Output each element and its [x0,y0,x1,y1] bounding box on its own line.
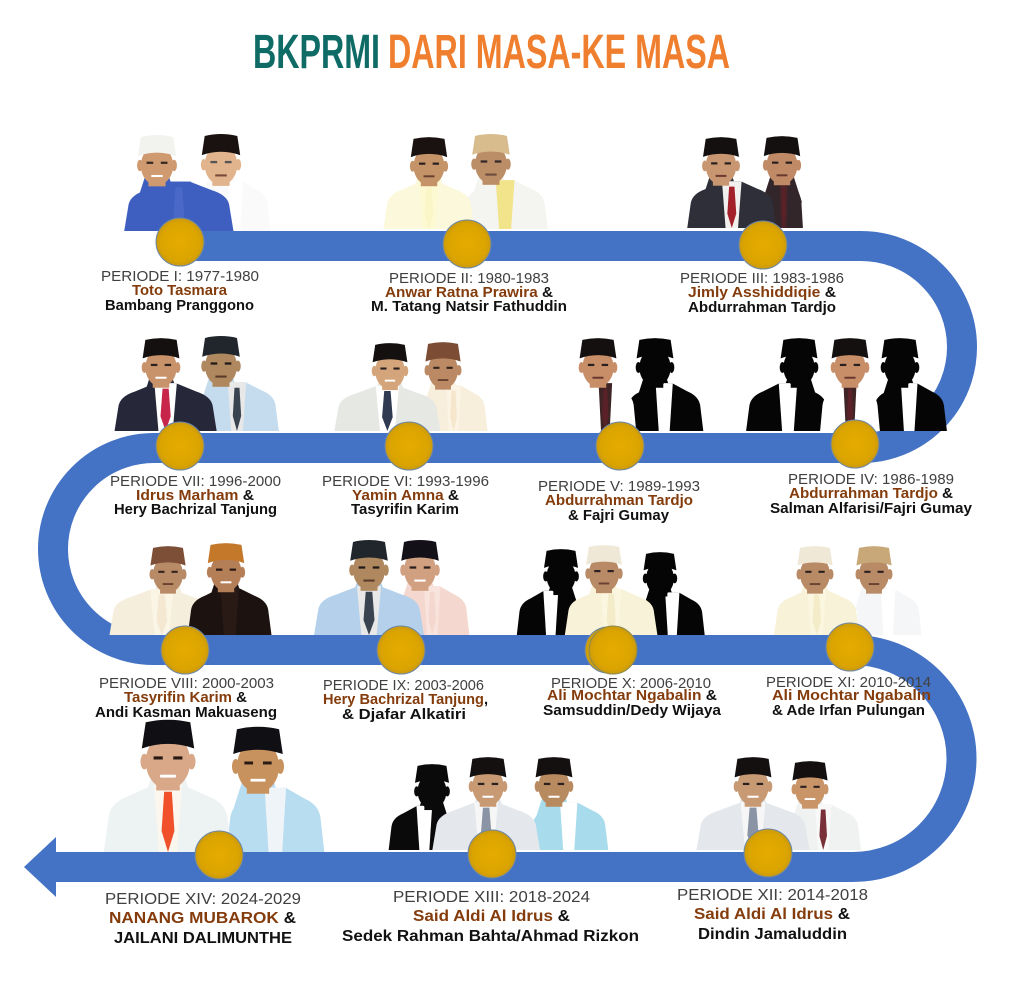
period label: Tasyrifin Karim & [124,689,247,706]
period label: PERIODE VI: 1993-1996 [322,473,489,490]
portraits: Yamin Amna and Tasyrifin Karim [334,342,487,431]
period label: Ali Mochtar Ngabalin & [547,687,717,704]
panel: periode XIV [104,720,324,947]
period label: Hery Bachrizal Tanjung, [323,691,488,708]
period label: NANANG MUBAROK & [109,910,296,927]
period label: Bambang Pranggono [105,297,254,314]
panel: periode V [538,338,703,524]
panel: periode III [680,136,844,316]
portraits: Tasyrifin Karim and Andi Kasman Makuaseng [109,543,271,635]
period label [543,675,722,719]
period label [322,473,489,518]
period label [95,675,277,721]
period label: PERIODE VIII: 2000-2003 [99,675,274,692]
title: BKPRMI [253,26,380,79]
panel: periode IX [314,540,488,723]
portraits: Said Aldi Al Idrus, silhouette and Ahmad Rizkon [389,757,608,850]
milestone dot [161,626,209,674]
period label: JAILANI DALIMUNTHE [114,930,292,947]
period label: PERIODE IV: 1986-1989 [788,471,954,488]
portraits: Abdurrahman Tardjo and silhouette [575,338,703,431]
portraits: Anwar Ratna Prawira and M. Tatang Natsir Fathuddin [384,134,548,229]
period label [766,674,931,719]
period label: PERIODE II: 1980-1983 [389,270,549,287]
period label: Hery Bachrizal Tanjung [114,501,277,518]
portraits: Ali Mochtar Ngabalin and silhouettes [517,545,705,635]
panel: periode II [371,134,567,315]
period label: Anwar Ratna Prawira & [385,284,553,301]
portraits: Idrus Marham and Hery Bachrizal Tanjung [115,336,279,431]
milestone dot [156,218,204,266]
period label: PERIODE XI: 2010-2014 [766,674,931,691]
period label: PERIODE IX: 2003-2006 [323,677,484,694]
milestone dot [156,422,204,470]
period label: Yamin Amna & [352,487,459,504]
period label: & Djafar Alkatiri [342,706,466,723]
period label [323,677,488,723]
period label [110,473,281,518]
milestone dot [443,220,491,268]
milestone dot [596,422,644,470]
portraits: Abdurrahman Tardjo and silhouettes [746,338,947,431]
period label: Samsuddin/Dedy Wijaya [543,702,722,719]
panel: periode VII [110,336,281,518]
milestone dot [744,829,792,877]
period label [105,891,301,947]
period label: PERIODE XII: 2014-2018 [677,887,868,904]
period label [680,270,844,316]
period label: Dindin Jamaluddin [698,926,847,943]
timeline arrow path [24,246,962,897]
period label: & Fajri Gumay [568,507,670,524]
panel: periode XIII [342,757,639,945]
portraits: Ali Mochtar Ngabalin and Ade Irfan Pulungan [774,546,922,635]
period label [770,471,973,517]
period label: PERIODE III: 1983-1986 [680,270,844,287]
period label [371,270,567,315]
period label [342,889,639,945]
portraits: Said Aldi Al Idrus and Dindin Jamaluddin [696,757,861,850]
period label: PERIODE VII: 1996-2000 [110,473,281,490]
milestone dot [377,626,425,674]
portraits: Nanang Mubarok and Jailani Dalimunthe [104,720,324,852]
period label: Abdurrahman Tardjo [688,299,836,316]
panel: periode XI [766,546,931,719]
milestone dots [585,626,637,674]
period label: PERIODE V: 1989-1993 [538,478,700,495]
period label: Tasyrifin Karim [351,501,459,518]
period label: Toto Tasmara [132,282,228,299]
period label: Jimly Asshiddiqie & [688,284,836,301]
period label: Sedek Rahman Bahta/Ahmad Rizkon [342,928,639,945]
period label [101,268,259,314]
period label: Said Aldi Al Idrus & [694,906,850,923]
milestone dot [739,221,787,269]
period label [677,887,868,943]
panel: periode IV [746,338,973,517]
period label: Andi Kasman Makuaseng [95,704,277,721]
panel: periode I [101,134,270,314]
milestone dot [195,831,243,879]
period label: Idrus Marham & [136,487,254,504]
period label: Abdurrahman Tardjo & [789,485,953,502]
period label: PERIODE XIV: 2024-2029 [105,891,301,908]
title [253,26,730,79]
period label: PERIODE X: 2006-2010 [551,675,711,692]
panel: periode X [517,545,722,719]
portraits: Hery Bachrizal Tanjung and Djafar Alkatiri [314,540,469,635]
milestone dot [826,623,874,671]
panel: periode VIII [95,543,277,721]
period label: & Ade Irfan Pulungan [772,702,925,719]
period label: M. Tatang Natsir Fathuddin [371,298,567,315]
period label: Salman Alfarisi/Fajri Gumay [770,500,973,517]
period label: Abdurrahman Tardjo [545,492,693,509]
period label: Said Aldi Al Idrus & [413,908,570,925]
period label: PERIODE XIII: 2018-2024 [393,889,590,906]
portraits: Toto Tasmara and Bambang Pranggono [124,134,270,231]
panel: periode XII [677,757,868,943]
portraits: Jimly Asshiddiqie and Abdurrahman Tardjo [687,136,803,228]
period label [538,478,700,524]
milestone dot [468,830,516,878]
milestone dot [831,420,879,468]
panel: periode VI [322,342,489,518]
title: DARI MASA-KE MASA [388,26,730,79]
milestone dot [385,422,433,470]
period label: PERIODE I: 1977-1980 [101,268,259,285]
period label: Ali Mochtar Ngabalin [772,687,931,704]
